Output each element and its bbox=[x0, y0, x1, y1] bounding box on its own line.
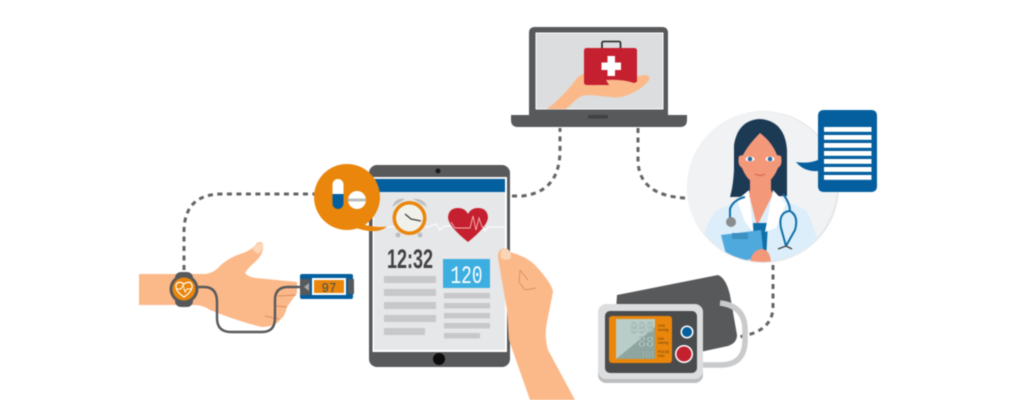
icon: fingers over case bbox=[606, 76, 649, 92]
blue reading box: 120 bbox=[450, 262, 482, 291]
finger creases bbox=[265, 295, 296, 319]
white coat bbox=[704, 198, 817, 261]
eyes bbox=[746, 156, 754, 162]
neck and chest bbox=[749, 176, 773, 226]
icon: open hand bbox=[547, 73, 649, 109]
blue button bbox=[680, 326, 694, 338]
capsule bbox=[332, 179, 344, 194]
tablet screen bbox=[372, 177, 507, 352]
display labels: mmHg bbox=[658, 328, 668, 332]
coat lapels bbox=[737, 190, 753, 232]
display labels bbox=[658, 324, 670, 358]
display labels: /min bbox=[658, 354, 665, 358]
icon: doctor portrait bbox=[687, 110, 877, 270]
LCD digits: 888 bbox=[630, 320, 654, 338]
tube bbox=[700, 303, 745, 365]
watch bbox=[170, 272, 198, 307]
stethoscope bbox=[730, 194, 796, 246]
icon: blood pressure monitor bbox=[598, 275, 745, 383]
icon: alarm clock bbox=[392, 199, 427, 238]
cable bbox=[198, 287, 301, 332]
display labels: SYS bbox=[658, 324, 666, 328]
ECG trace bbox=[376, 212, 505, 233]
display labels: mmHg bbox=[658, 341, 668, 345]
infographic canvas bbox=[138, 26, 878, 400]
hand bbox=[139, 242, 297, 327]
LCD digits: 88 bbox=[638, 334, 654, 352]
mouth bbox=[755, 174, 765, 176]
right text lines bbox=[444, 293, 490, 338]
dashed connector: doctor to blood pressure monitor bbox=[738, 265, 773, 337]
icon: orange pill speech bubble bbox=[314, 164, 387, 231]
blue scrub top bbox=[752, 222, 768, 252]
icon: heart bbox=[448, 208, 488, 242]
red button bbox=[675, 345, 693, 363]
laptop base bbox=[511, 115, 687, 127]
dashed connector: tablet to laptop bbox=[512, 128, 560, 196]
time readout: 12:32 bbox=[387, 244, 433, 274]
pulse oximeter bbox=[300, 274, 354, 299]
pulse oximeter: 97 bbox=[322, 281, 336, 297]
home button bbox=[433, 353, 445, 365]
LCD bbox=[616, 319, 655, 359]
header bar bbox=[375, 179, 505, 192]
hand on clipboard bbox=[750, 249, 771, 262]
LCD digits bbox=[630, 320, 654, 362]
orange display panel bbox=[609, 316, 672, 363]
hair bbox=[730, 119, 787, 197]
laptop screen bbox=[536, 32, 664, 110]
left text lines bbox=[384, 276, 436, 335]
blue reading box bbox=[443, 259, 490, 291]
icon: hand with watch and pulse oximeter bbox=[139, 242, 354, 332]
thumb nail bbox=[252, 243, 263, 254]
clipboard bbox=[721, 230, 764, 262]
LCD digits: 88 bbox=[642, 350, 654, 362]
camera bbox=[436, 168, 440, 174]
round tablet bbox=[348, 191, 366, 209]
dashed connector: laptop to doctor bbox=[638, 128, 686, 198]
monitor body bbox=[598, 307, 703, 383]
blue note speech bubble bbox=[796, 110, 877, 192]
dashed connector: watch to pill bubble bbox=[184, 194, 316, 270]
display labels: DIA bbox=[658, 337, 664, 341]
panel: tablet bbox=[369, 165, 510, 367]
icon: hand holding tablet bbox=[498, 248, 575, 400]
icon: first aid case bbox=[584, 42, 637, 85]
panel: laptop bbox=[511, 27, 687, 127]
face bbox=[738, 133, 782, 184]
cuff bbox=[616, 275, 737, 352]
display labels: PULSE bbox=[658, 350, 670, 354]
